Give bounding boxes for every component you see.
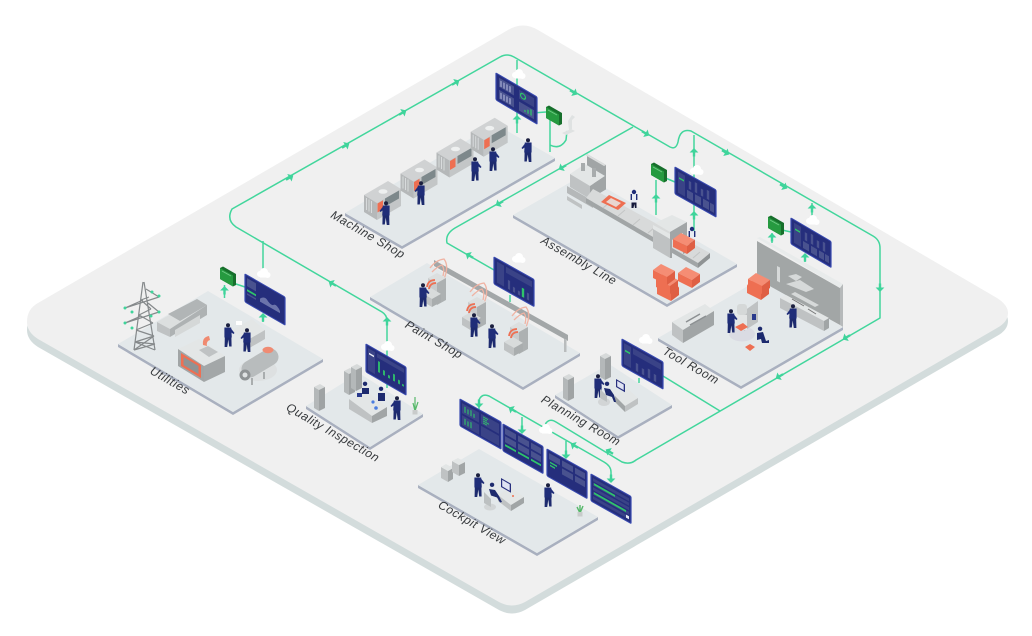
utilities staff — [224, 323, 251, 352]
quality floor — [306, 373, 423, 450]
machines row — [364, 118, 508, 220]
orange parts — [653, 233, 700, 301]
painters — [419, 283, 498, 348]
orange crate — [747, 273, 770, 300]
cockpit staff — [474, 473, 554, 510]
assembly floor — [513, 175, 737, 307]
arrow into dashboard — [513, 115, 521, 124]
machine shop dashboard — [496, 73, 537, 124]
turbine — [239, 347, 277, 385]
inspection table — [349, 391, 387, 423]
cooling unit — [157, 299, 207, 337]
dashboard one — [460, 399, 501, 449]
panel: planning room — [539, 334, 672, 449]
quality dashboard — [366, 344, 406, 395]
orange tray — [601, 195, 626, 210]
panel: quality inspection — [284, 341, 423, 465]
robotic arms — [430, 259, 529, 330]
panel: tool room — [658, 203, 843, 389]
workbench — [780, 295, 829, 331]
utilities stubs — [224, 283, 263, 322]
conveyor belt — [586, 189, 710, 268]
cabinets — [563, 353, 611, 401]
paint rail — [434, 260, 568, 352]
tool room stubs — [772, 203, 812, 262]
gateway — [546, 106, 562, 126]
cloud — [257, 268, 270, 278]
desk — [498, 487, 524, 511]
CNC machine — [729, 301, 758, 342]
meeting desk — [232, 319, 265, 350]
heading: Cockpit View — [436, 498, 509, 548]
plant — [412, 397, 418, 414]
cabinets — [314, 364, 362, 411]
machine shop stub lines — [517, 60, 567, 152]
dashboard three — [547, 449, 587, 498]
gantry — [653, 215, 687, 258]
cloud — [539, 424, 552, 434]
dashboard four — [591, 474, 631, 523]
transmission tower — [124, 282, 160, 350]
cloud — [806, 215, 820, 225]
panel: utilities — [118, 266, 323, 415]
cabinets — [441, 458, 465, 482]
assembly robot housing — [567, 154, 606, 209]
machine operators — [380, 138, 532, 225]
planner desk — [615, 389, 638, 412]
panel: assembly line — [513, 135, 737, 307]
control desk — [672, 304, 714, 343]
heading: Machine Shop — [328, 208, 408, 261]
desktop monitor — [501, 478, 511, 493]
dashboard two — [503, 424, 543, 473]
cockpit floor — [418, 449, 598, 556]
paint floor — [370, 263, 580, 390]
assembly stub lines — [656, 135, 694, 233]
cloud — [512, 253, 526, 263]
flow arrows — [284, 77, 884, 483]
cloud — [639, 334, 652, 344]
utilities dashboard — [245, 274, 285, 325]
assembly dashboard — [675, 167, 716, 217]
back wall — [757, 237, 843, 327]
assembly workers — [631, 190, 695, 245]
panel: cockpit view — [418, 399, 631, 556]
paint dashboard — [494, 257, 534, 306]
tool room floor — [658, 279, 843, 389]
heading: Quality Inspection — [284, 400, 382, 465]
assembly gateway — [651, 162, 667, 182]
heading: Utilities — [148, 364, 192, 398]
technicians — [727, 304, 797, 343]
planners — [594, 374, 616, 406]
cloud — [381, 341, 394, 351]
inspectors — [362, 382, 401, 420]
tool room gateway — [768, 216, 784, 236]
panel: paint shop — [370, 253, 580, 390]
desktop monitor — [616, 379, 625, 392]
small orange part — [745, 344, 755, 351]
heading: Assembly Line — [538, 233, 619, 288]
orange generator — [178, 336, 225, 382]
heading: Tool Room — [660, 344, 722, 387]
machine shop floor — [345, 124, 555, 249]
vision sensor — [562, 115, 575, 135]
planning stub line — [638, 378, 640, 383]
stub line — [509, 295, 511, 302]
planning dashboard — [622, 339, 663, 389]
utilities gateway — [220, 266, 236, 286]
panel: machine shop — [328, 60, 575, 261]
paint booths — [422, 273, 528, 356]
quality stub line — [386, 383, 388, 388]
tool room dashboard — [791, 218, 831, 267]
green data network lines — [230, 55, 884, 483]
utilities floor — [118, 291, 323, 415]
planning floor — [555, 364, 672, 439]
plant — [577, 505, 583, 516]
cloud — [512, 69, 526, 79]
cloud — [690, 165, 704, 175]
heading: Paint Shop — [403, 317, 465, 362]
heading: Planning Room — [539, 392, 623, 449]
